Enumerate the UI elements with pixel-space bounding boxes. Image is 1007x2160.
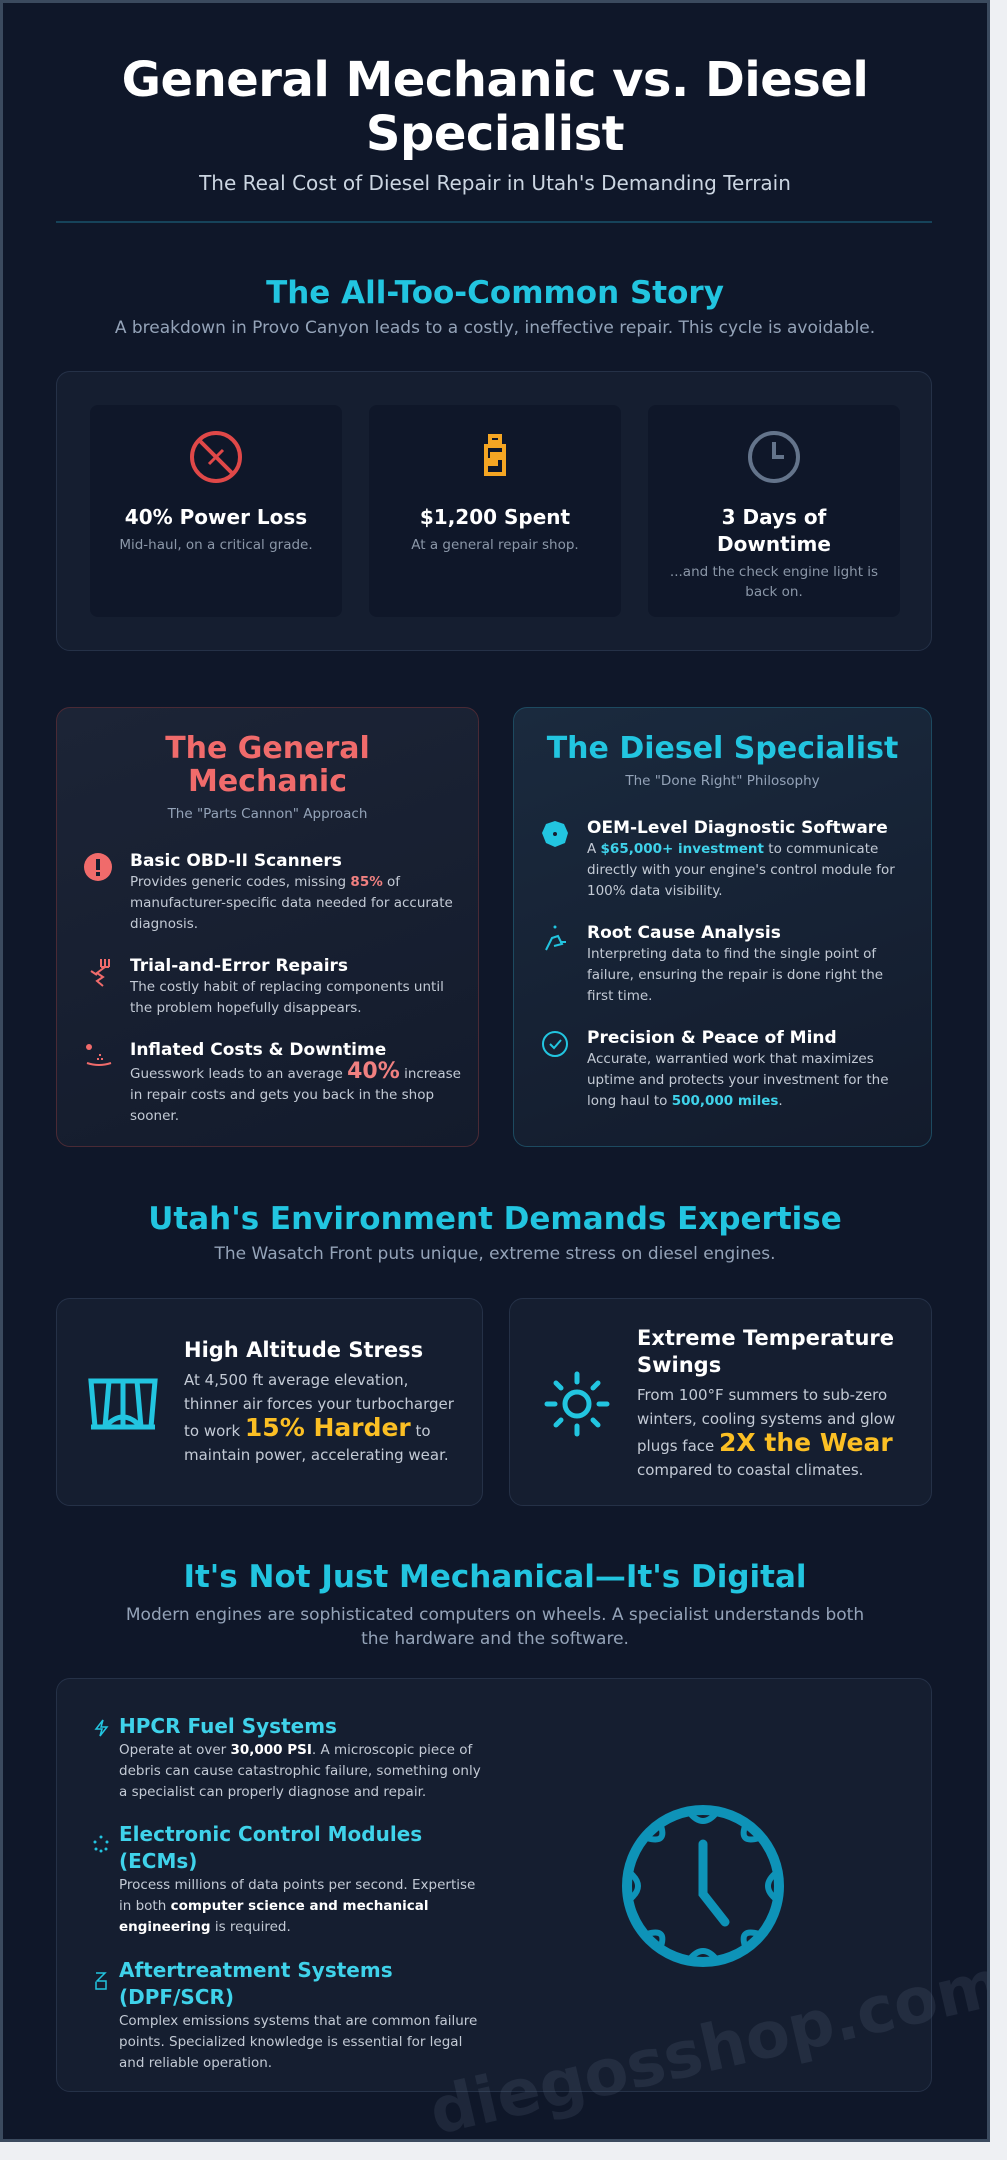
item: inflated costs: [86, 1040, 461, 1124]
heading: story: The All-Too-Common Story: [266, 275, 724, 311]
card: downtime: back on.: [745, 584, 803, 600]
item: trial and error: [90, 956, 444, 1016]
heading: general mechanic: The General: [165, 731, 370, 766]
panel: general mechanic: The "Parts Cannon" Approach: [168, 806, 367, 822]
item: precision: Accurate, warrantied work that maximizes uptime and protects your investment for the long haul to 500,000 miles.: [587, 1051, 889, 1109]
panel: diesel specialist: [513, 707, 932, 1147]
panel: temperature: From 100°F summers to sub-zero winters, cooling systems and glow plugs face 2X the Wear compared to coastal climates.: [637, 1386, 895, 1479]
item: OEM software: OEM-Level Diagnostic Software: [587, 818, 888, 838]
icon: power loss: [190, 431, 242, 483]
item: OEM software: A $65,000+ investment to communicate directly with your engine's control module for 100% data visibility.: [587, 841, 895, 899]
item: inflated costs: Inflated Costs & Downtime: [130, 1040, 386, 1060]
item: aftertreatment: [95, 1958, 477, 2071]
subtitle: The Real Cost of Diesel Repair in Utah's Demanding Terrain: [199, 171, 791, 195]
card: cost: $1,200 Spent: [420, 505, 570, 529]
item: ECM: Process millions of data points per second. Expertise in both computer science and mechanical engineering is required.: [119, 1877, 475, 1935]
title: Specialist: [366, 106, 624, 162]
title: [122, 52, 868, 162]
item: scanners: Provides generic codes, missing 85% of manufacturer-specific data needed for accurate diagnosis.: [130, 874, 453, 932]
panel: general mechanic: [56, 707, 479, 1147]
item: HPCR: Operate at over 30,000 PSI. A microscopic piece of debris can cause catastrophic failure, something only a specialist can properly diagnose and repair.: [119, 1742, 481, 1800]
icon: altitude: [88, 1378, 158, 1430]
panel: altitude: At 4,500 ft average elevation, thinner air forces your turbocharger to work 15% Harder to maintain power, accelerating wear.: [184, 1371, 454, 1464]
heading: general mechanic: Mechanic: [188, 764, 347, 799]
panel: altitude: [56, 1298, 483, 1506]
item: ECM: Electronic Control Modules (ECMs): [119, 1822, 422, 1873]
item: ECM: [94, 1822, 475, 1935]
item: scanners: Basic OBD-II Scanners: [130, 851, 342, 871]
card: power loss: [90, 405, 342, 617]
item: aftertreatment: Aftertreatment Systems (DPF/SCR): [119, 1958, 393, 2009]
heading: utah: Utah's Environment Demands Expertise: [148, 1201, 842, 1237]
item: root cause: [545, 923, 883, 1004]
item: precision: [542, 1028, 889, 1109]
digital subtitle: the hardware and the software.: [361, 1629, 629, 1649]
item: inflated costs: Guesswork leads to an average 40% increase in repair costs and gets you back in the shop sooner.: [130, 1059, 461, 1124]
card: power loss: 40% Power Loss: [125, 505, 307, 529]
heading: general mechanic: [165, 731, 370, 799]
utah subtitle: The Wasatch Front puts unique, extreme stress on diesel engines.: [215, 1244, 775, 1264]
item: precision: Precision & Peace of Mind: [587, 1028, 837, 1048]
icon: money: [484, 434, 506, 476]
item: HPCR: HPCR Fuel Systems: [119, 1714, 337, 1738]
panel: diesel specialist: The "Done Right" Philosophy: [625, 773, 820, 789]
card: downtime: ...and the check engine light is: [670, 564, 878, 580]
card: downtime: [648, 405, 900, 617]
icon: clock: [748, 431, 800, 483]
digital subtitle: Modern engines are sophisticated computers on wheels. A specialist understands both: [126, 1605, 864, 1625]
item: trial and error: Trial-and-Error Repairs: [130, 956, 348, 976]
title: General Mechanic vs. Diesel: [122, 52, 868, 108]
panel: temperature: [509, 1298, 932, 1506]
item: scanners: [84, 851, 453, 932]
panel: story: [56, 371, 932, 651]
item: aftertreatment: Complex emissions systems that are common failure points. Specialized knowledge is essential for legal and reliable operation.: [119, 2013, 477, 2071]
heading: diesel specialist: The Diesel Specialist: [547, 731, 898, 766]
icon: sun: [544, 1372, 610, 1436]
card: cost: [369, 405, 621, 617]
item: trial and error: The costly habit of replacing components until the problem hopefully disappears.: [130, 979, 444, 1016]
story subtitle: A breakdown in Provo Canyon leads to a costly, ineffective repair. This cycle is avoidable.: [115, 318, 875, 338]
icon: gear clock: [622, 1805, 784, 1967]
panel: altitude: High Altitude Stress: [184, 1338, 423, 1362]
digital subtitle: [126, 1605, 864, 1649]
card: downtime: 3 Days of: [722, 505, 826, 529]
card: downtime: Downtime: [717, 532, 831, 556]
item: root cause: Interpreting data to find the single point of failure, ensuring the repair is done right the first time.: [587, 946, 883, 1004]
panel: temperature: Extreme Temperature Swings: [637, 1326, 894, 1377]
card: cost: At a general repair shop.: [411, 537, 579, 553]
heading: digital: It's Not Just Mechanical—It's Digital: [183, 1559, 807, 1595]
card: power loss: Mid-haul, on a critical grade.: [119, 537, 313, 553]
item: HPCR: [94, 1714, 481, 1800]
panel: digital: [56, 1678, 932, 2092]
item: root cause: Root Cause Analysis: [587, 923, 781, 943]
item: OEM software: [542, 818, 895, 899]
